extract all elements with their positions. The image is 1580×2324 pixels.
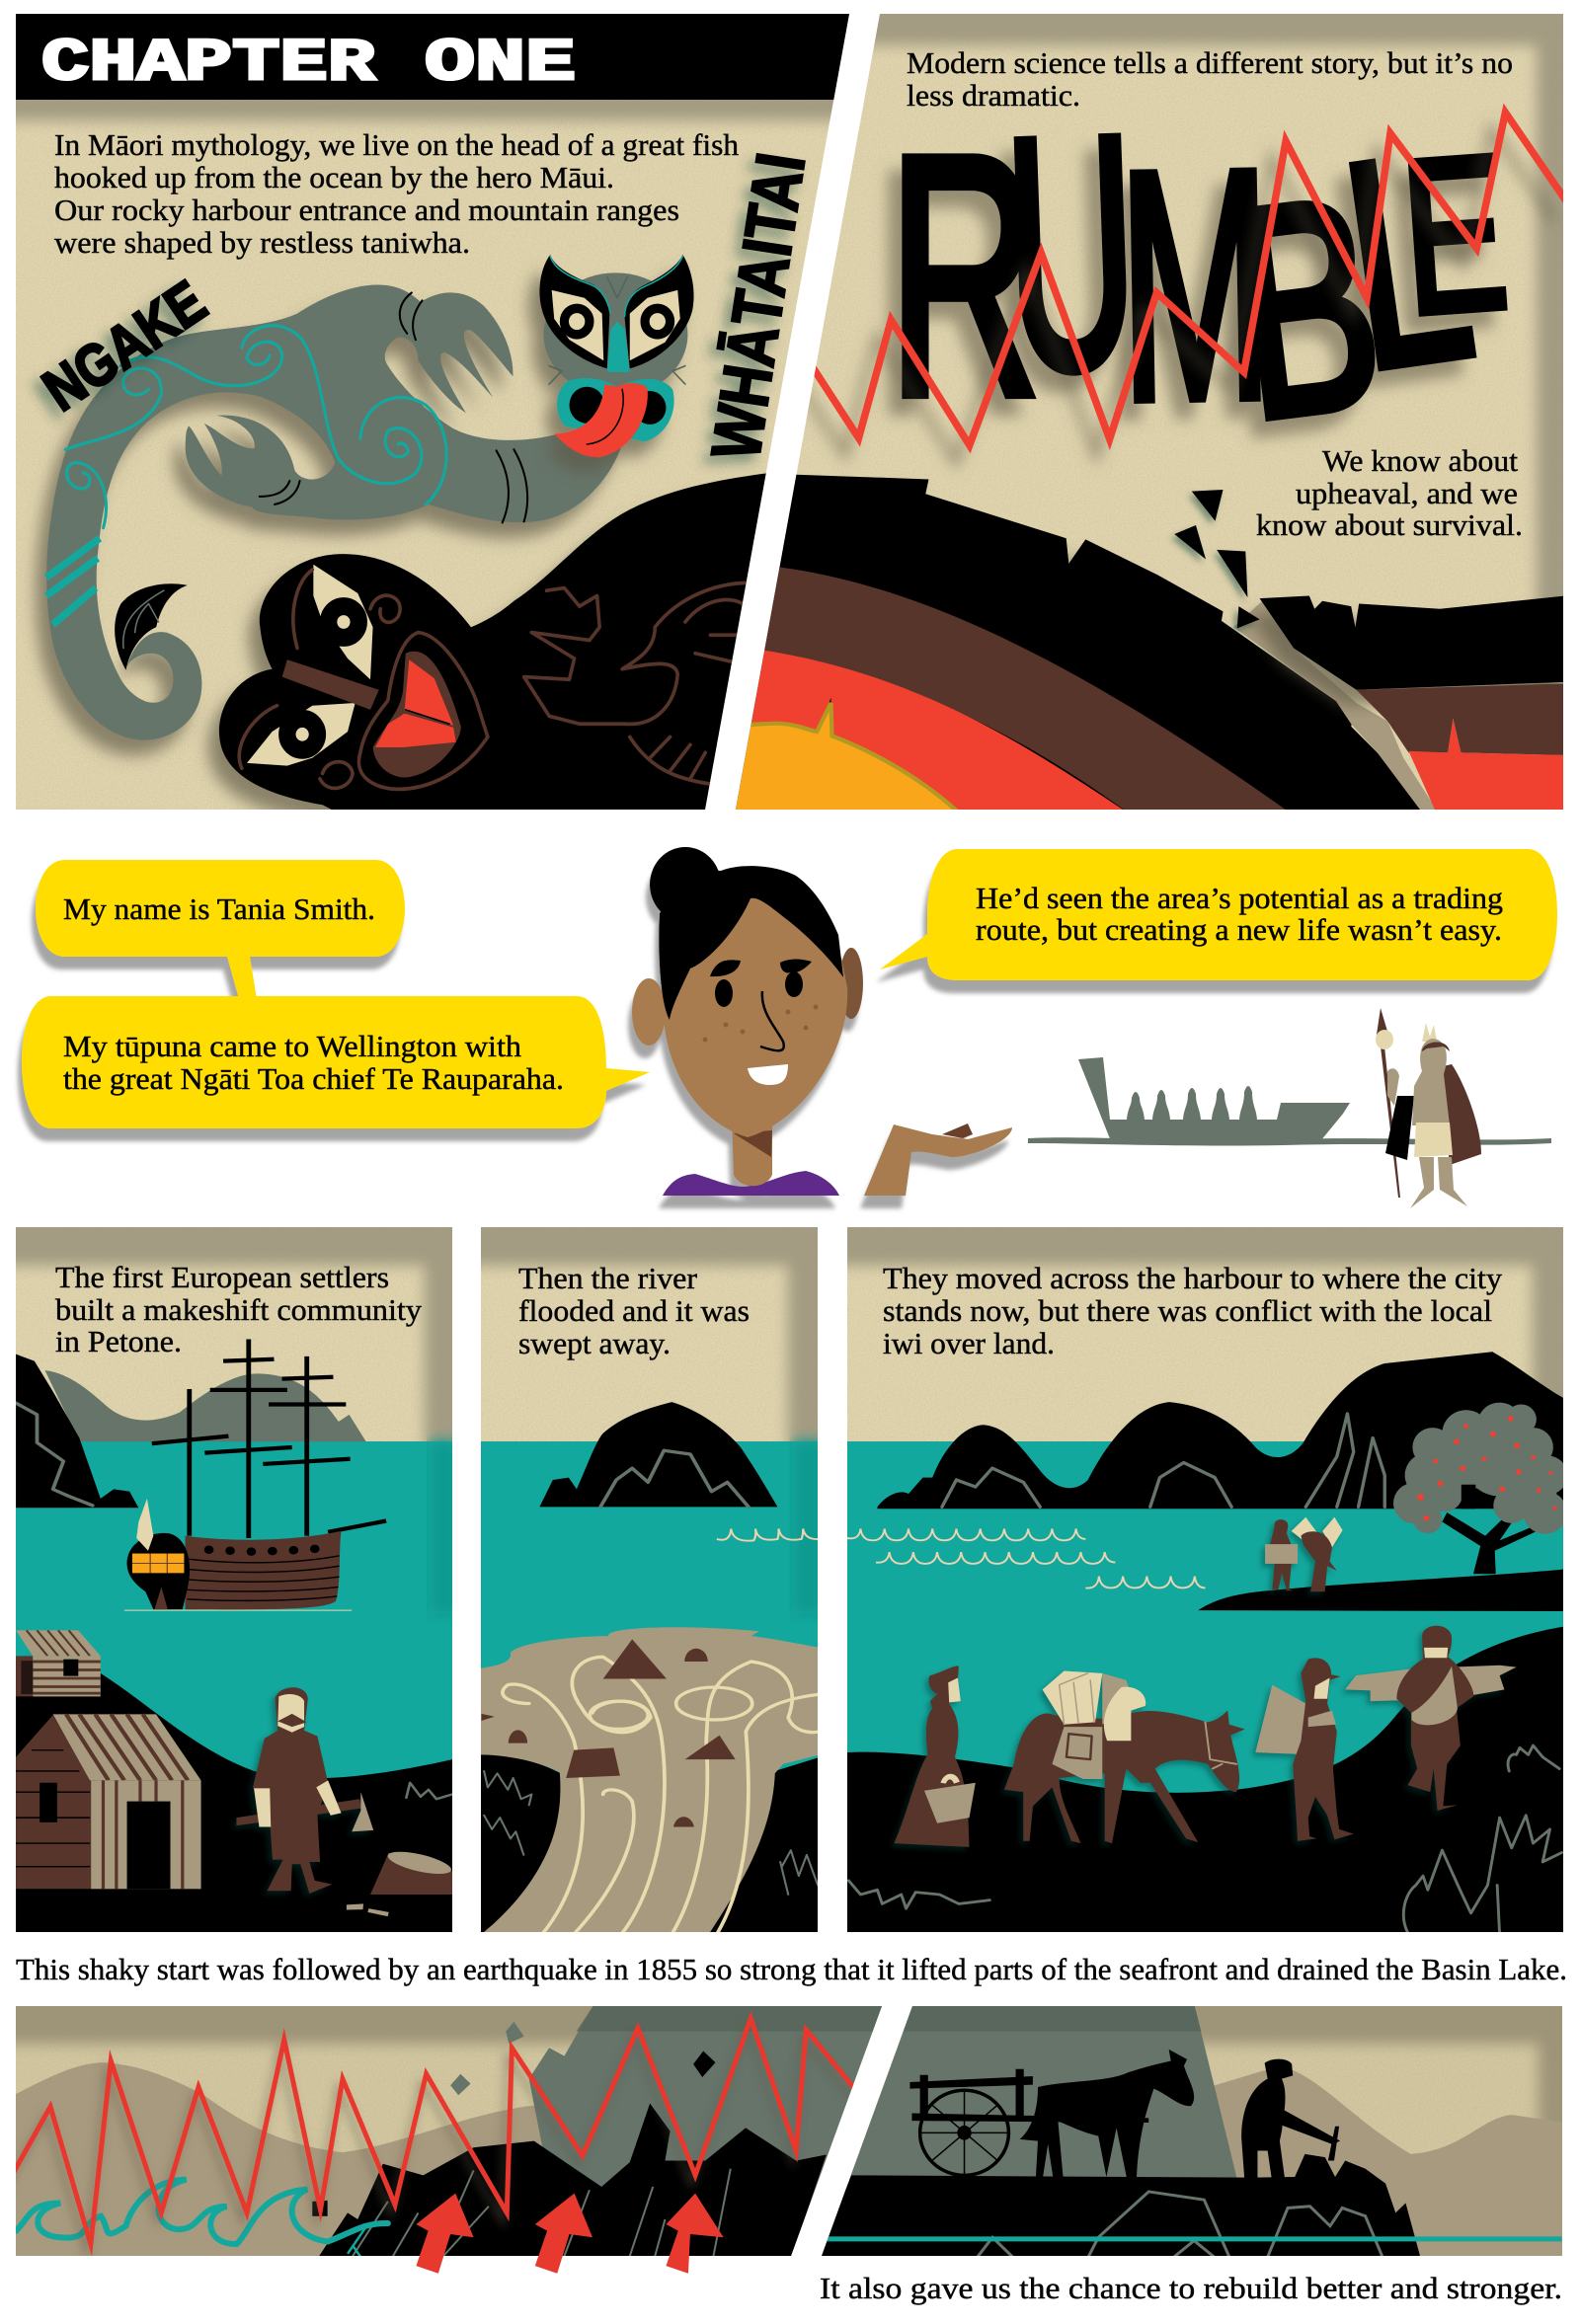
black uplifted rocks xyxy=(317,2104,827,2259)
text: Māori mythology intro: In Māori mythology, we live on the head of a great fish xyxy=(54,127,740,162)
earth crust and layers, right xyxy=(1233,596,1565,815)
scrub lines xyxy=(848,1745,1562,1934)
panel: first European settlers in Petone xyxy=(0,1227,459,1934)
word: RUMBLE: M xyxy=(1117,104,1274,468)
grass xyxy=(484,1771,818,1895)
hills xyxy=(877,1352,1564,1509)
panel: river flood xyxy=(444,1227,825,1934)
black land xyxy=(479,1754,820,1934)
Whātaitai eyes xyxy=(247,565,373,766)
title: CHAPTER ONE: ONE xyxy=(425,31,576,98)
tan hills xyxy=(1209,2065,1567,2259)
land xyxy=(16,1662,455,1934)
speech bubble: tūpuna: the great Ngāti Toa chief Te Rauparaha. xyxy=(63,1061,564,1096)
arrow 3 xyxy=(666,2194,724,2274)
large cabin xyxy=(16,1714,201,1889)
character: Tania Smith xyxy=(632,847,1012,1196)
teal waves xyxy=(16,2180,388,2244)
face xyxy=(664,893,847,1137)
black arm bands xyxy=(260,292,527,522)
pack horse xyxy=(1004,1670,1245,1843)
panel: earthquake uplift xyxy=(0,2004,928,2281)
settler carrying sack xyxy=(1255,1658,1354,1841)
title: CHAPTER ONE xyxy=(41,31,576,98)
pōhutukawa tree xyxy=(1393,1403,1567,1574)
word: RUMBLE: R xyxy=(889,85,1040,466)
title: CHAPTER ONE: CHAPTER xyxy=(41,31,375,98)
text: river flooded: swept away. xyxy=(518,1326,671,1360)
panel: rumble earth cross-section xyxy=(691,14,1570,835)
speech bubble: trading route xyxy=(880,849,1557,980)
text: first European settlers: The first European settlers xyxy=(55,1260,389,1294)
horse and cart silhouette xyxy=(909,2050,1194,2177)
debris xyxy=(481,1639,736,1827)
arrow 2 xyxy=(535,2194,592,2274)
panel: moving across the harbour xyxy=(810,1227,1567,1934)
rock fragments xyxy=(1174,490,1260,628)
purple top xyxy=(663,1171,839,1196)
seismic red zigzag xyxy=(810,113,1568,445)
neck xyxy=(732,1116,772,1186)
text: river flooded xyxy=(518,1261,750,1360)
black island xyxy=(539,1402,777,1507)
flood swirl lines xyxy=(503,1657,820,1934)
label: WHĀTAITAI: WHĀTAITAI xyxy=(697,148,820,464)
grey trapezoid backdrop xyxy=(846,2004,1237,2180)
teal swirls on Ngake xyxy=(46,326,446,625)
text: Māori mythology intro: hooked up from the ocean by the hero Māui. xyxy=(54,160,614,194)
grey green rock face xyxy=(529,2004,887,2259)
settler carrying plank xyxy=(1345,1626,1517,1811)
text: Māori mythology intro xyxy=(54,127,740,260)
text: we know about survival xyxy=(1256,443,1523,542)
word: RUMBLE xyxy=(889,66,1515,482)
waves xyxy=(717,1529,820,1541)
text: moved across the harbour: stands now, but there was conflict with the local xyxy=(883,1293,1492,1328)
black ground xyxy=(817,2154,1421,2259)
Whātaitai carving lines xyxy=(239,570,750,788)
black headland xyxy=(16,1355,138,1508)
panel: rebuilding after the quake xyxy=(770,2004,1570,2281)
teal river strip xyxy=(827,2236,1562,2241)
sailing ship xyxy=(124,1339,386,1610)
island xyxy=(1198,1570,1564,1611)
text: river flooded: flooded and it was xyxy=(518,1293,750,1328)
text: we know about survival: upheaval, and we xyxy=(1296,476,1518,510)
speech bubble: trading route: route, but creating a new life wasn’t easy. xyxy=(976,912,1502,947)
Whātaitai brow xyxy=(282,659,379,710)
speech bubble: trading route: He’d seen the area’s potential as a trading xyxy=(976,881,1503,915)
seismic red zigzag xyxy=(10,2018,854,2244)
flood water and debris xyxy=(479,1627,820,1934)
figure: Te Rauparaha with spear xyxy=(1376,1008,1481,1208)
arrow 1 xyxy=(416,2194,474,2274)
text: first European settlers: in Petone. xyxy=(55,1324,182,1358)
speech bubble: tūpuna xyxy=(22,996,650,1128)
settler with axe xyxy=(236,1687,373,1894)
text: rebuild better: It also gave us the chance to rebuild better and stronger. xyxy=(820,2271,1562,2305)
crack lines xyxy=(353,2169,731,2256)
taniwha Ngake body xyxy=(46,285,622,740)
facial features xyxy=(703,960,818,1085)
woman with basket xyxy=(894,1666,976,1847)
flying rock fragments xyxy=(312,2022,715,2216)
arrows: uplift xyxy=(416,2194,724,2274)
speech bubble: name: My name is Tania Smith. xyxy=(63,891,375,926)
speech bubble: name xyxy=(36,860,405,999)
land foreground xyxy=(844,1627,1564,1934)
panel: chapter one, Ngake and Whātaitai xyxy=(0,14,869,851)
tail fin xyxy=(115,583,188,670)
hand xyxy=(864,1124,1012,1196)
Ngake mask head xyxy=(539,255,694,457)
tree stump and chips xyxy=(347,1847,453,1916)
text: modern science xyxy=(907,45,1513,113)
word: RUMBLE: L xyxy=(1327,90,1488,430)
text: first European settlers: built a makeshift community xyxy=(55,1292,423,1327)
text: Māori mythology intro: Our rocky harbour entrance and mountain ranges xyxy=(54,193,679,227)
label: NGAKE: NGAKE xyxy=(32,268,217,424)
text: we know about survival: know about survival. xyxy=(1256,507,1523,542)
ground crack outlines xyxy=(978,2192,1382,2257)
distant settler and horse xyxy=(1265,1517,1343,1591)
earth crust and layers, left xyxy=(729,475,1438,815)
ears xyxy=(632,948,863,1046)
text: 1855 earthquake: This shaky start was followed by an earthquake in 1855 so strong that it lifted parts of the seafront and drained the Basin Lake. xyxy=(16,1952,1567,1986)
waves xyxy=(847,1529,1205,1588)
text: moved across the harbour: They moved across the harbour to where the city xyxy=(883,1261,1503,1295)
text: modern science: Modern science tells a different story, but it’s no xyxy=(907,45,1513,80)
text: we know about survival: We know about xyxy=(1322,443,1518,478)
man digging silhouette xyxy=(1241,2059,1340,2179)
taniwha Whātaitai body xyxy=(219,473,771,815)
illustration: waka canoe on water xyxy=(1028,1057,1551,1146)
text: moved across the harbour: iwi over land. xyxy=(883,1326,1055,1360)
word: RUMBLE: B xyxy=(1219,135,1396,482)
speech bubble: tūpuna: My tūpuna came to Wellington with xyxy=(63,1029,522,1063)
Whātaitai mouth xyxy=(358,633,488,789)
text: river flooded: Then the river xyxy=(518,1261,698,1295)
grass xyxy=(406,1783,452,1799)
text: first European settlers xyxy=(55,1260,423,1358)
hair xyxy=(650,847,843,1020)
grey hills xyxy=(45,1370,366,1441)
text: modern science: less dramatic. xyxy=(907,78,1080,113)
text: Māori mythology intro: were shaped by restless taniwha. xyxy=(54,225,470,260)
tan hills xyxy=(10,2062,645,2259)
word: RUMBLE: E xyxy=(1394,108,1515,360)
text: moved across the harbour xyxy=(883,1261,1503,1360)
word: RUMBLE: U xyxy=(1001,66,1142,439)
small cabin xyxy=(16,1630,101,1696)
